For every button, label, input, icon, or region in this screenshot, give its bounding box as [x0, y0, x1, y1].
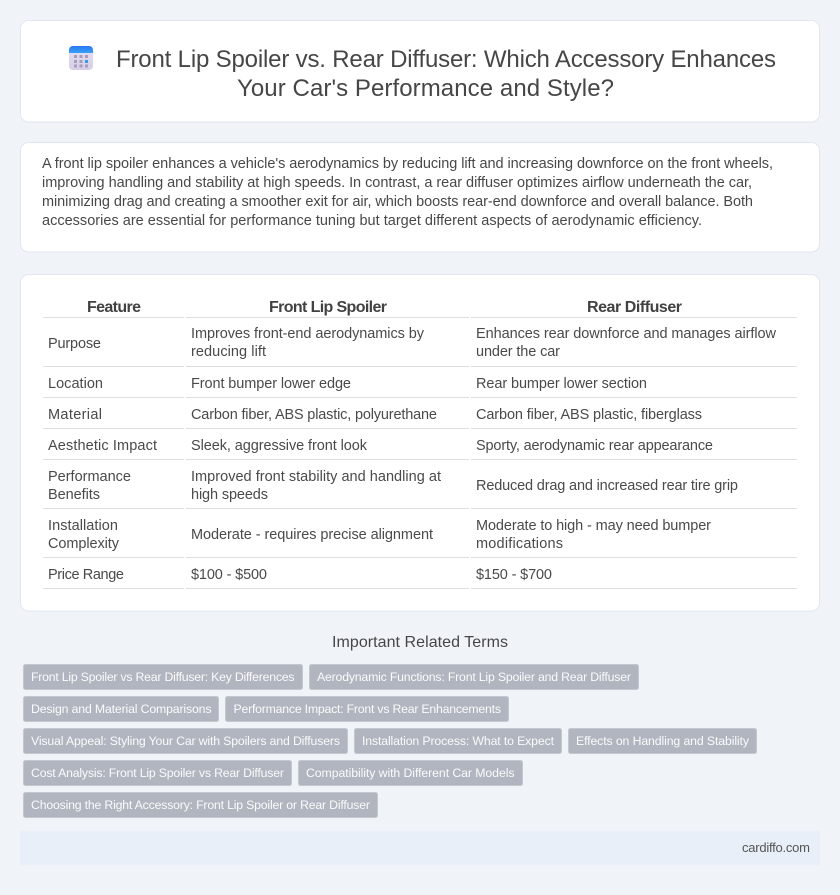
table row: location: Rear bumper lower section [476, 376, 647, 392]
tag: aerodynamic functions: Aerodynamic Functions: Front Lip Spoiler and Rear Diffuser [317, 670, 631, 684]
table row: material: Material [48, 407, 102, 423]
table row: material: Carbon fiber, ABS plastic, fiberglass [476, 407, 702, 423]
panel: header [20, 20, 820, 122]
table row: purpose: Improves front-end aerodynamics by [191, 326, 425, 342]
table row: performance benefits: Improved front stability and handling at [191, 469, 441, 485]
table row: aesthetic impact: Aesthetic Impact [48, 438, 157, 454]
table row: aesthetic impact [43, 438, 797, 460]
table row: purpose: reducing lift [191, 344, 266, 360]
title [116, 46, 776, 102]
table row: material: Carbon fiber, ABS plastic, polyurethane [191, 407, 437, 423]
table row: purpose: Enhances rear downforce and manages airflow [476, 326, 777, 342]
tag: aerodynamic functions [310, 664, 638, 690]
tag: visual appeal [24, 728, 348, 754]
tag: cost analysis: Cost Analysis: Front Lip Spoiler vs Rear Diffuser [31, 766, 284, 780]
tag: key differences: Front Lip Spoiler vs Rear Diffuser: Key Differences [31, 670, 294, 684]
footer: cardiffo.com [742, 840, 810, 855]
tag: handling and stability: Effects on Handling and Stability [576, 734, 750, 748]
tag: cost analysis [24, 760, 292, 786]
table row: price range: $150 - $700 [476, 567, 552, 583]
table header row: Feature [87, 299, 141, 316]
table row: location [43, 376, 797, 398]
title: Front Lip Spoiler vs. Rear Diffuser: Which Accessory Enhances [116, 46, 776, 73]
tag: performance impact: Performance Impact: Front vs Rear Enhancements [234, 702, 501, 716]
panel: summary paragraph [20, 142, 820, 252]
icon: calendar [69, 46, 93, 70]
related terms tags [24, 664, 756, 818]
table row: installation complexity [43, 518, 797, 558]
tag: design and material [24, 696, 218, 722]
tag: choosing the right accessory: Choosing the Right Accessory: Front Lip Spoiler or Rear Diffuser [31, 798, 370, 812]
table header row [43, 299, 797, 318]
table row: performance benefits [43, 469, 797, 509]
table row: aesthetic impact: Sporty, aerodynamic rear appearance [476, 438, 713, 454]
table row: material [43, 407, 797, 429]
tag: installation process: Installation Process: What to Expect [362, 734, 555, 748]
table row: price range: Price Range [48, 567, 124, 583]
table row: performance benefits: Performance [48, 469, 131, 485]
heading: important related terms: Important Related Terms [332, 634, 508, 651]
table row: installation complexity: Installation [48, 518, 118, 534]
panel: summary paragraph: accessories are essential for performance tuning but target different aspects of aerodynamic efficiency. [42, 213, 702, 229]
table row: location: Front bumper lower edge [191, 376, 351, 392]
table row: purpose: under the car [476, 344, 560, 360]
panel: summary paragraph: improving handling and stability at high speeds. In contrast, a rear diffuser optimizes airflow underneath the car, [42, 175, 752, 191]
table row: price range: $100 - $500 [191, 567, 267, 583]
tag: key differences [24, 664, 302, 690]
table row: installation complexity: Moderate to high - may need bumper [476, 518, 711, 534]
footer [20, 831, 820, 865]
tag: design and material: Design and Material Comparisons [31, 702, 212, 716]
tag: installation process [354, 728, 562, 754]
tag: compatibility: Compatibility with Different Car Models [306, 766, 514, 780]
table row: aesthetic impact: Sleek, aggressive front look [191, 438, 368, 454]
tag: performance impact [226, 696, 508, 722]
table row: price range [43, 567, 797, 589]
table row: installation complexity: Moderate - requires precise alignment [191, 527, 433, 543]
table row: installation complexity: modifications [476, 536, 563, 552]
table row: performance benefits: Reduced drag and increased rear tire grip [476, 478, 738, 494]
tag: handling and stability [568, 728, 756, 754]
panel: summary paragraph: minimizing drag and creating a smoother exit for air, which boosts rear-end downforce and overall balance. Both [42, 194, 753, 210]
tag: visual appeal: Visual Appeal: Styling Your Car with Spoilers and Diffusers [31, 734, 340, 748]
table row: location: Location [48, 376, 103, 392]
table row: performance benefits: Benefits [48, 487, 100, 503]
panel: comparison table [20, 274, 820, 611]
title: Your Car's Performance and Style? [237, 75, 614, 102]
tag: compatibility [298, 760, 522, 786]
table row: performance benefits: high speeds [191, 487, 268, 503]
table row: purpose: Purpose [48, 336, 101, 352]
table row: installation complexity: Complexity [48, 536, 120, 552]
tag: choosing the right accessory [24, 792, 378, 818]
table header row: Front Lip Spoiler [269, 299, 387, 316]
table header row: Rear Diffuser [587, 299, 682, 316]
panel: summary paragraph: A front lip spoiler enhances a vehicle's aerodynamics by reducing lift and increasing downforce on the front wheels, [42, 156, 773, 172]
table row: purpose [43, 326, 797, 367]
